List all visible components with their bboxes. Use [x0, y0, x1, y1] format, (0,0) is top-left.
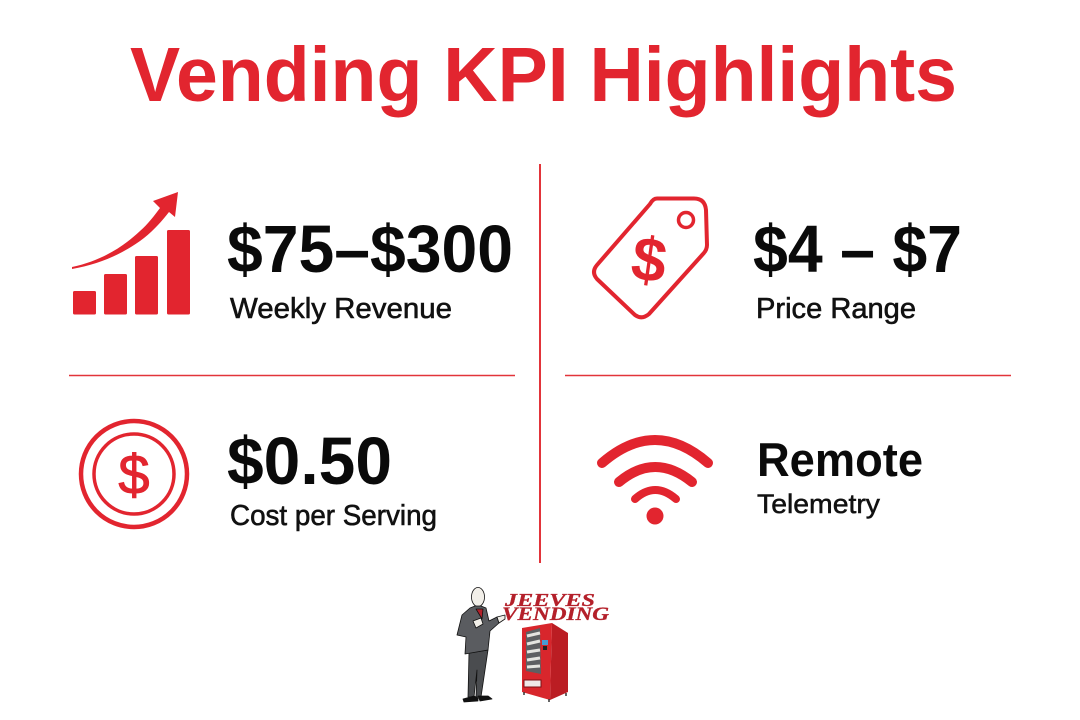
vending machine	[522, 623, 568, 702]
panel: weekly revenue	[72, 192, 513, 325]
panel: remote telemetry	[602, 433, 923, 524]
value: cost per serving: $0.50	[227, 424, 392, 499]
icon: dollar coin: $	[118, 443, 150, 506]
value: price range: $4 – $7	[753, 212, 962, 287]
value: remote: Remote	[757, 433, 923, 486]
icon: price tag	[594, 198, 707, 317]
icon: price tag: $	[627, 224, 671, 297]
logo: Jeeves Vending	[457, 588, 609, 702]
logo wordmark	[502, 590, 609, 625]
icon: dollar coin	[81, 421, 187, 527]
label: weekly revenue: Weekly Revenue	[230, 293, 452, 325]
logo wordmark: JEEVES	[504, 590, 595, 610]
logo wordmark: VENDING	[502, 604, 609, 625]
figure: butler	[457, 588, 505, 702]
label: cost per serving: Cost per Serving	[230, 500, 437, 532]
icon: wifi signal	[602, 440, 708, 524]
panel: cost per serving	[81, 421, 437, 532]
label: telemetry: Telemetry	[757, 489, 881, 519]
title: Vending KPI Highlights	[130, 32, 957, 118]
panel: price range	[594, 198, 962, 325]
label: price range: Price Range	[756, 293, 916, 325]
icon: rising bar chart with arrow	[72, 192, 190, 314]
value: weekly revenue: $75–$300	[227, 212, 513, 287]
